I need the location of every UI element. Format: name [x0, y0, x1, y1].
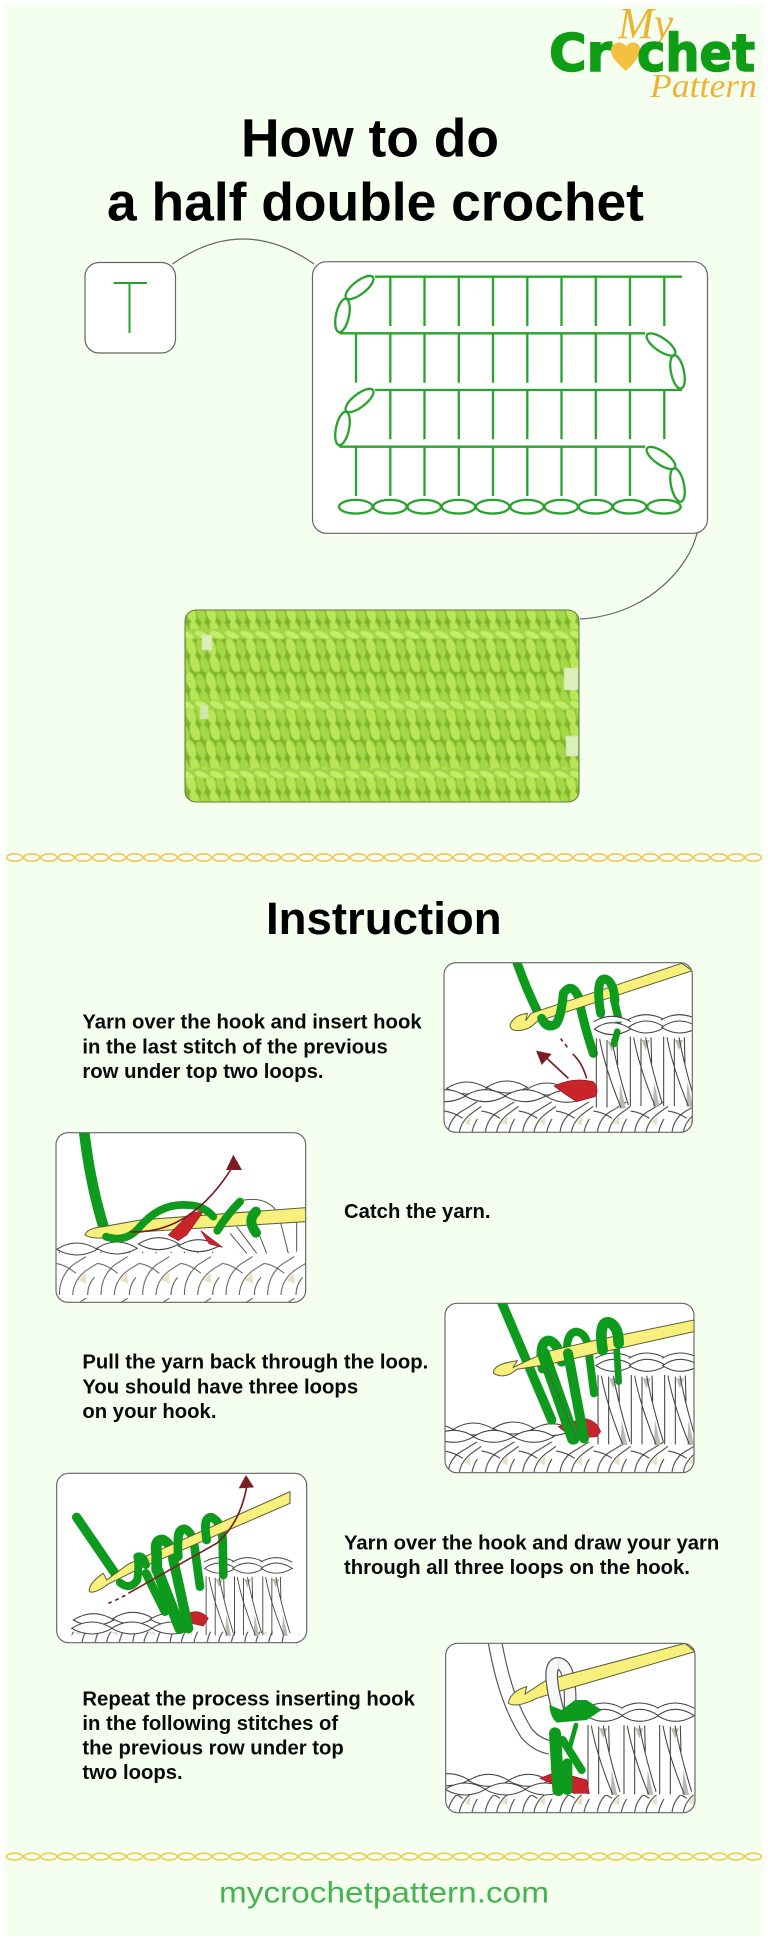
step 1 text: row under top two loops.: [82, 1061, 324, 1083]
chart rows of T stitches: [339, 277, 682, 496]
title: a half double crochet: [107, 174, 644, 233]
step 5 text: the previous row under top: [82, 1738, 344, 1760]
logo: My Crochet Pattern: My: [617, 0, 673, 48]
connector arc: symbol to chart: [172, 239, 314, 264]
step 2 illustration: [56, 1130, 306, 1302]
step 4 text: Yarn over the hook and draw your yarn: [344, 1532, 719, 1554]
logo: My Crochet Pattern: Pattern: [649, 68, 757, 105]
title: [107, 109, 644, 233]
step 2 text: Catch the yarn.: [344, 1201, 491, 1223]
turning chains: [333, 272, 687, 503]
heading: Instruction: Instruction: [266, 893, 502, 944]
step 1 illustration: [425, 960, 698, 1132]
step 4 text: through all three loops on the hook.: [344, 1557, 690, 1579]
step 1 text: in the last stitch of the previous: [82, 1036, 388, 1058]
photo swatch of crochet fabric: [185, 610, 579, 802]
step 3 text: You should have three loops: [82, 1376, 358, 1398]
step 5 text: Repeat the process inserting hook: [82, 1688, 415, 1710]
foundation chain: [339, 500, 681, 514]
step 1 text: Yarn over the hook and insert hook: [82, 1012, 422, 1034]
connector arc: chart to swatch: [580, 533, 697, 619]
divider: chain bottom: [6, 1851, 762, 1863]
step 3 illustration: [444, 1302, 695, 1474]
step 5 illustration: [428, 1642, 695, 1813]
divider: chain top: [6, 852, 762, 864]
logo: My Crochet Pattern: [549, 0, 757, 105]
step 4 illustration: [57, 1473, 307, 1643]
step 5 text: in the following stitches of: [82, 1713, 338, 1735]
symbol box: half double crochet T: [85, 262, 176, 353]
step 3 text: on your hook.: [82, 1401, 216, 1423]
title: How to do: [241, 109, 499, 168]
step 5 text: two loops.: [82, 1762, 183, 1784]
step 3 text: Pull the yarn back through the loop.: [82, 1352, 428, 1374]
footer url: mycrochetpattern.com: [219, 1877, 549, 1910]
logo: My Crochet Pattern: Cr: [549, 24, 612, 84]
logo: My Crochet Pattern: chet: [637, 24, 755, 84]
panel: stitch chart: [312, 262, 708, 533]
